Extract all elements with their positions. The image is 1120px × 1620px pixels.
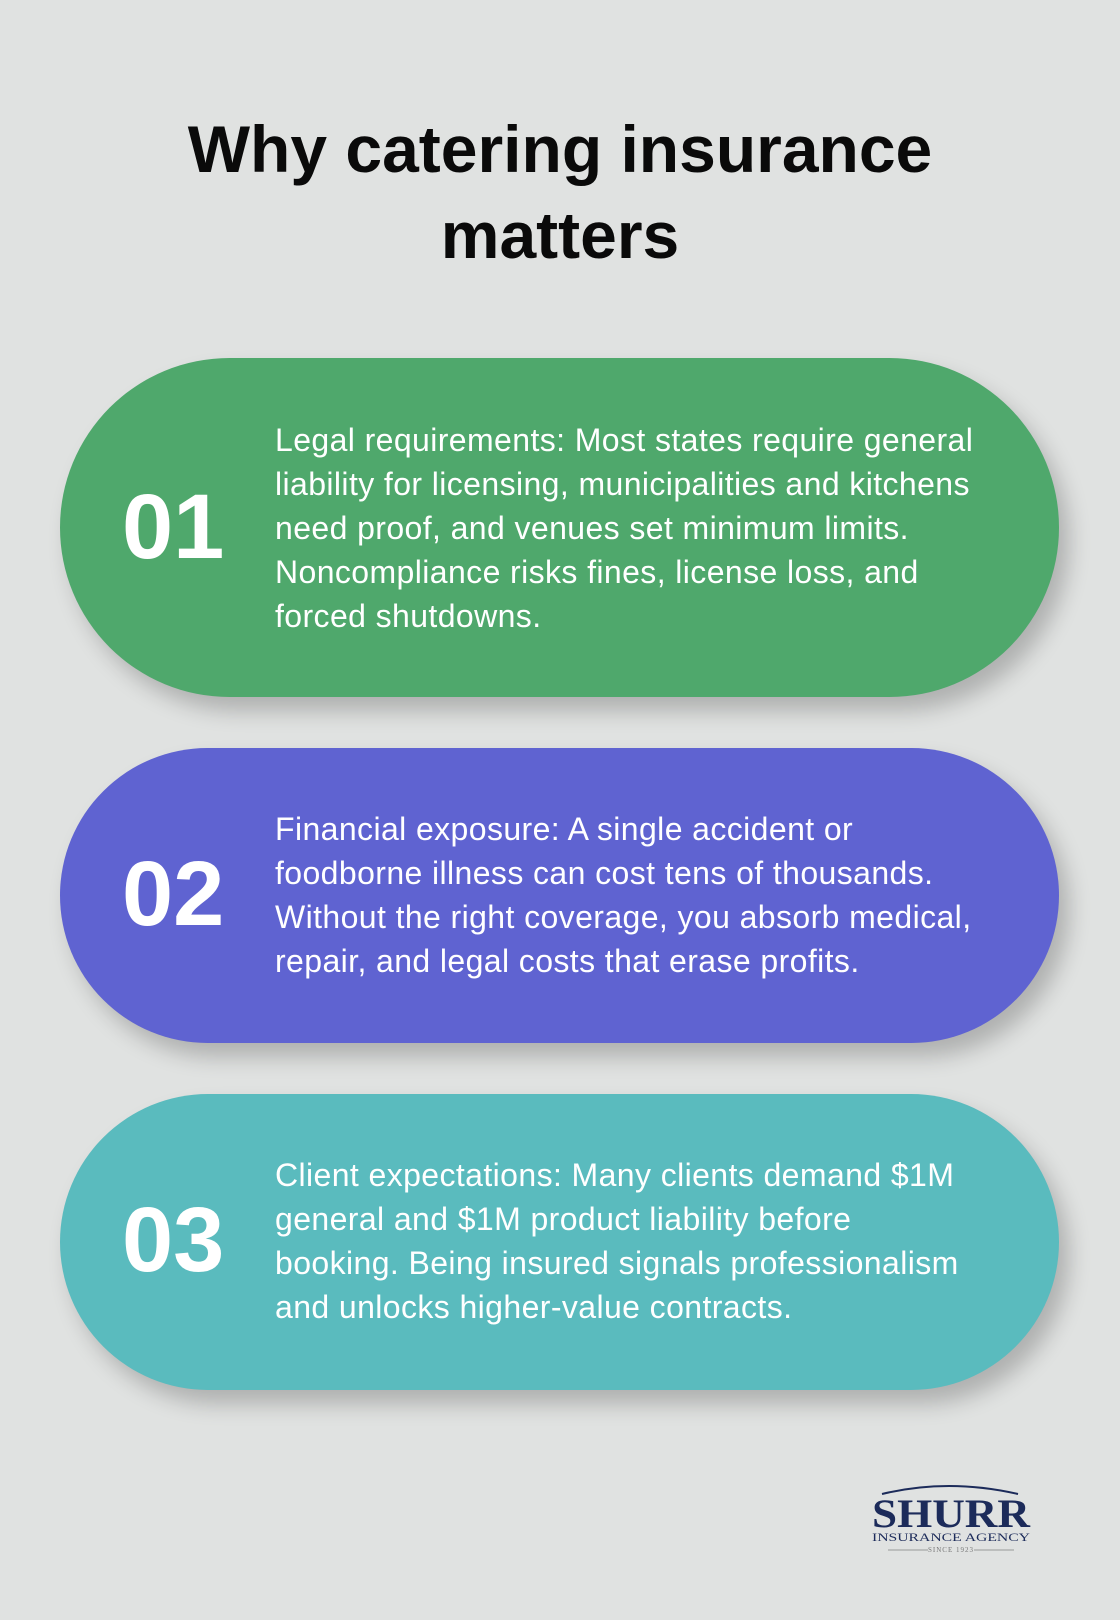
logo: INSURANCE AGENCY	[872, 1530, 1030, 1544]
panel: financial exposure	[60, 748, 1059, 1043]
text: client expectations: booking. Being insured signals professionalism	[275, 1245, 959, 1281]
title: matters	[441, 198, 679, 272]
text: legal requirements: forced shutdowns.	[275, 598, 542, 634]
panel: client expectations	[60, 1094, 1059, 1390]
text: client expectations: general and $1M product liability before	[275, 1201, 851, 1237]
text: client expectations	[275, 1157, 959, 1325]
number 01: 01	[122, 476, 224, 578]
text: client expectations: Client expectations: Many clients demand $1M	[275, 1157, 954, 1193]
title	[188, 112, 932, 272]
text: financial exposure: Without the right coverage, you absorb medical,	[275, 899, 972, 935]
text: legal requirements	[275, 422, 973, 634]
text: legal requirements: liability for licensing, municipalities and kitchens	[275, 466, 970, 502]
text: legal requirements: need proof, and venues set minimum limits.	[275, 510, 909, 546]
text: financial exposure: Financial exposure: A single accident or	[275, 811, 853, 847]
panel: legal requirements	[60, 358, 1059, 697]
number 03: 03	[122, 1189, 224, 1291]
text: legal requirements: Legal requirements: Most states require general	[275, 422, 973, 458]
text: client expectations: and unlocks higher-value contracts.	[275, 1289, 792, 1325]
text: financial exposure: foodborne illness can cost tens of thousands.	[275, 855, 933, 891]
title: Why catering insurance	[188, 112, 932, 186]
text: legal requirements: Noncompliance risks fines, license loss, and	[275, 554, 919, 590]
logo: SHURR	[872, 1491, 1031, 1536]
text: financial exposure	[275, 811, 972, 979]
text: financial exposure: repair, and legal costs that erase profits.	[275, 943, 860, 979]
number 02: 02	[122, 843, 224, 945]
logo	[872, 1485, 1031, 1554]
logo: SINCE 1923	[928, 1546, 974, 1554]
